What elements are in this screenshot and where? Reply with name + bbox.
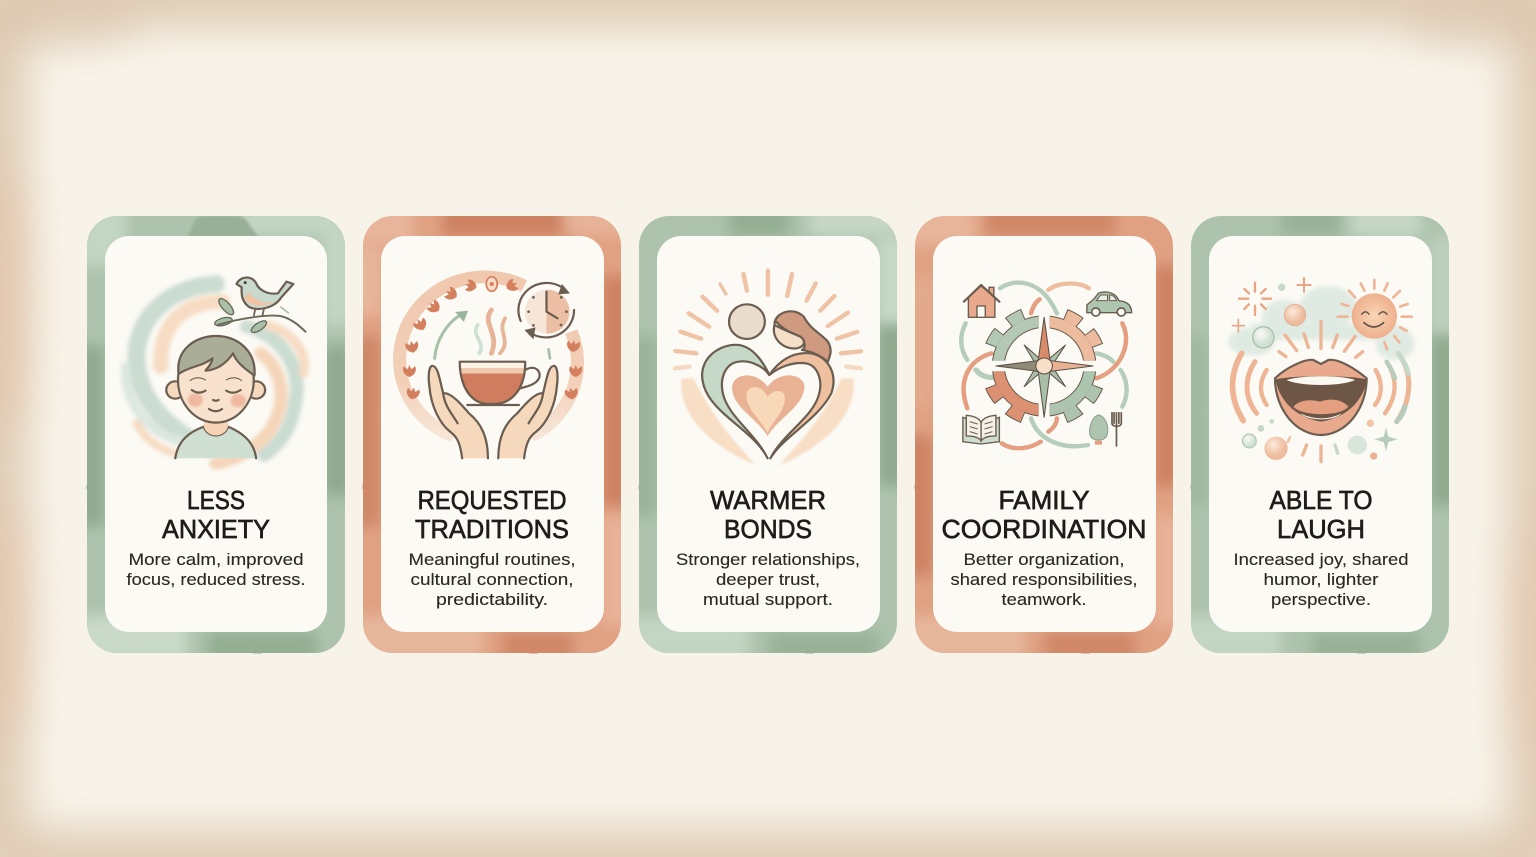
description: deeper trust, bbox=[716, 570, 820, 589]
card 4: family coordination bbox=[914, 216, 1173, 654]
title: less anxiety: LESS bbox=[187, 485, 245, 515]
icon detail: open laughing lips bbox=[1275, 360, 1367, 435]
title: family coordination: FAMILY bbox=[998, 485, 1090, 515]
card panel: white paper bbox=[105, 236, 327, 632]
icon detail: steam bbox=[476, 310, 505, 353]
icon detail: bird on branch bbox=[214, 278, 305, 335]
description: Meaningful routines, bbox=[408, 550, 576, 569]
title: family coordination: COORDINATION bbox=[942, 514, 1146, 544]
card panel: white paper bbox=[1209, 236, 1432, 632]
description: predictability. bbox=[436, 590, 548, 609]
card 5: able to laugh bbox=[1190, 216, 1449, 654]
icon detail: laughter sound arcs bbox=[1232, 353, 1409, 422]
icon detail: open book bbox=[963, 415, 999, 444]
description bbox=[676, 550, 860, 609]
icon detail: sparks and bubbles bbox=[1232, 278, 1398, 460]
icon: calm child with swirl and bird bbox=[126, 278, 305, 463]
description: focus, reduced stress. bbox=[126, 570, 306, 589]
icon detail: burst lines bbox=[1279, 322, 1363, 462]
icon: two figures forming a heart with rays bbox=[675, 271, 861, 465]
title: requested traditions: REQUESTED bbox=[418, 485, 566, 515]
icon detail: left figure bbox=[702, 304, 769, 458]
card 1: less anxiety bbox=[86, 216, 345, 654]
description: Stronger relationships, bbox=[676, 550, 860, 569]
icon detail: central heart bbox=[732, 375, 804, 436]
card panel: white paper bbox=[933, 236, 1156, 632]
icon detail: cupped hands bbox=[429, 366, 558, 458]
icon detail: smiling sun bbox=[1338, 280, 1412, 349]
icon detail: connecting arcs bbox=[961, 283, 1127, 448]
description: perspective. bbox=[1271, 590, 1371, 609]
title: family coordination bbox=[942, 485, 1146, 544]
card frame: terracotta watercolor bbox=[362, 216, 621, 654]
icon detail: arrow bbox=[435, 311, 468, 358]
description: shared responsibilities, bbox=[950, 570, 1138, 589]
card frame: green watercolor bbox=[1190, 216, 1449, 654]
title: requested traditions: TRADITIONS bbox=[415, 514, 569, 544]
description: mutual support. bbox=[703, 590, 833, 609]
icon detail: tea cup bbox=[460, 362, 540, 405]
title: warmer bonds: BONDS bbox=[724, 514, 812, 544]
card frame: green watercolor bbox=[638, 216, 897, 654]
card 2: requested traditions bbox=[362, 216, 621, 654]
icon detail: right figure bbox=[769, 311, 833, 458]
title: requested traditions bbox=[415, 485, 569, 544]
icon detail: compass star bbox=[996, 317, 1093, 417]
icon detail: egg and fork bbox=[1090, 413, 1121, 446]
card panel: white paper bbox=[381, 236, 604, 632]
card 3: warmer bonds bbox=[638, 216, 897, 654]
card frame: terracotta watercolor bbox=[914, 216, 1173, 654]
icon detail: car bbox=[1087, 292, 1132, 316]
title: able to laugh: LAUGH bbox=[1277, 514, 1365, 544]
description: Increased joy, shared bbox=[1234, 550, 1408, 569]
card frame: green watercolor bbox=[86, 216, 345, 654]
description: More calm, improved bbox=[128, 550, 304, 569]
title: warmer bonds bbox=[710, 485, 826, 544]
icon: hands holding tea within tradition ring bbox=[400, 277, 582, 458]
title: less anxiety: ANXIETY bbox=[162, 514, 270, 544]
description bbox=[950, 550, 1138, 609]
title: warmer bonds: WARMER bbox=[710, 485, 826, 515]
title: able to laugh bbox=[1270, 485, 1372, 544]
title: able to laugh: ABLE TO bbox=[1270, 485, 1372, 515]
icon detail: house bbox=[964, 285, 999, 317]
title: less anxiety bbox=[162, 485, 270, 544]
icon detail: rays bbox=[675, 271, 861, 368]
icon detail: pale cloud bbox=[1228, 286, 1414, 360]
icon: gears, compass and family objects bbox=[961, 283, 1132, 448]
description: humor, lighter bbox=[1264, 570, 1379, 589]
icon: laughing mouth with sun and bubbles bbox=[1228, 278, 1414, 462]
icon detail: gear quadrants bbox=[987, 311, 1101, 421]
description bbox=[1234, 550, 1408, 609]
description: teamwork. bbox=[1002, 590, 1086, 609]
card panel: white paper bbox=[657, 236, 880, 632]
description bbox=[126, 550, 306, 589]
icon detail: clock with cycle arrows bbox=[518, 283, 574, 358]
description: Better organization, bbox=[964, 550, 1124, 569]
description: cultural connection, bbox=[410, 570, 574, 589]
description bbox=[408, 550, 576, 609]
